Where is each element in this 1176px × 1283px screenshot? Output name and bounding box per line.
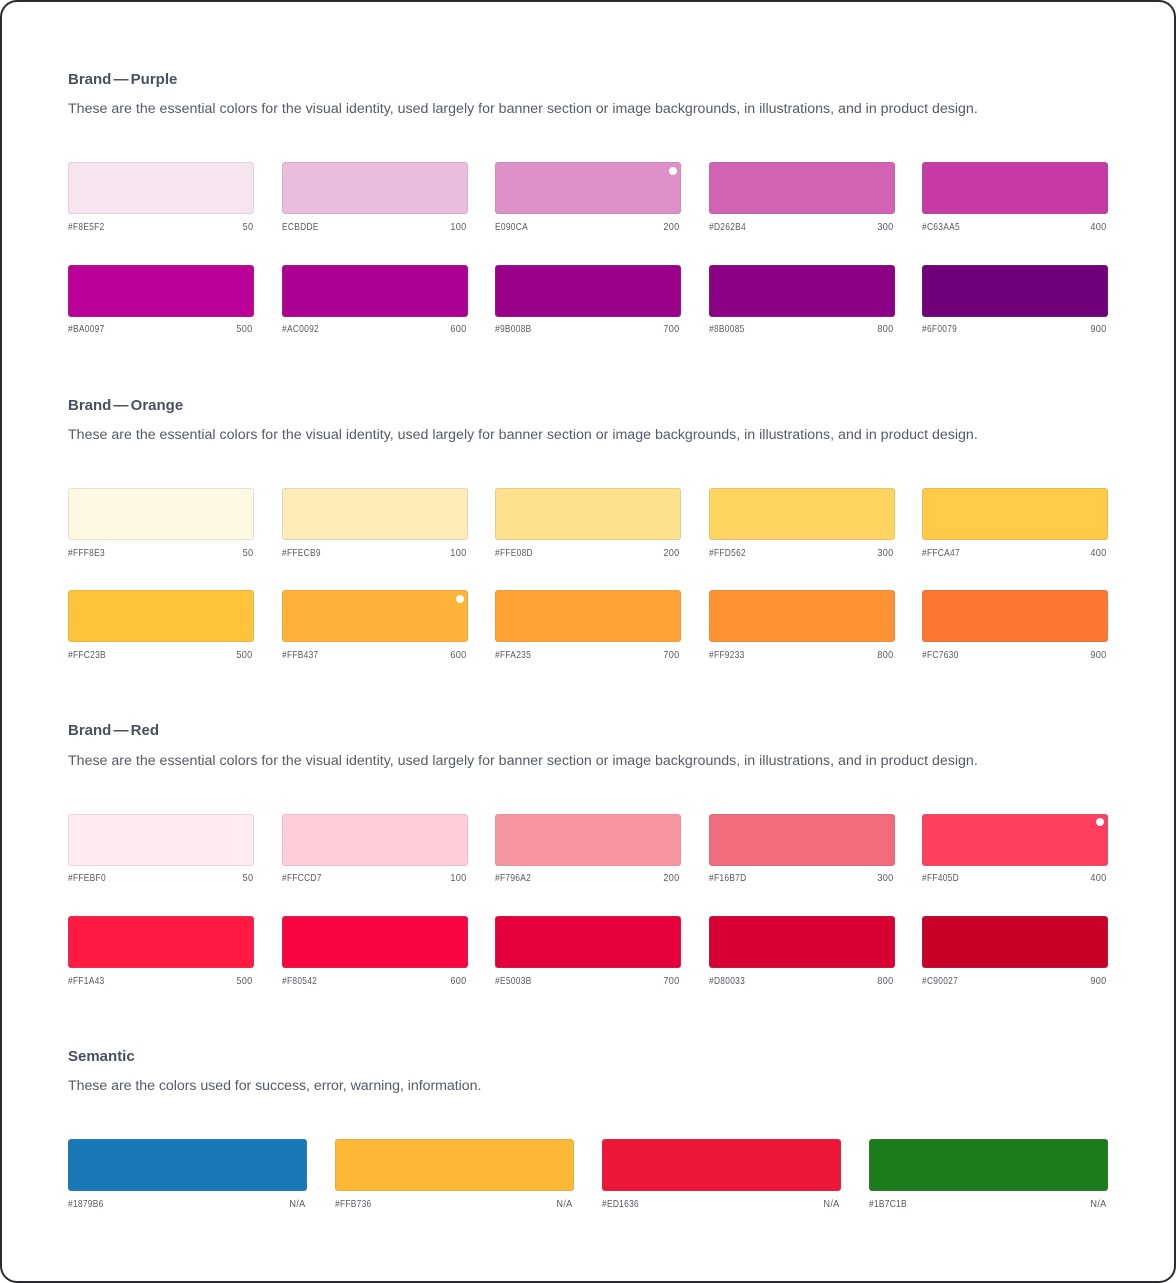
description: Brand Orange: These are the essential colors for the visual identity, used largely for banner section or image backgrounds, in illustrations, and in product design. bbox=[68, 427, 978, 443]
swatch: orange 400: 400 bbox=[1091, 546, 1107, 558]
swatch: purple 800: #8B0085 bbox=[708, 323, 744, 335]
swatch: red 300: #F16B7D bbox=[708, 872, 746, 884]
swatch: semantic blue bbox=[68, 1139, 307, 1210]
swatch: purple 600: 600 bbox=[450, 323, 466, 335]
swatch: purple 50: 50 bbox=[242, 221, 253, 233]
swatch: orange 500: 500 bbox=[237, 649, 253, 661]
swatch: purple 100: ECBDDE bbox=[282, 221, 318, 233]
heading: Semantic: Semantic bbox=[68, 1048, 135, 1064]
swatch: orange 50: 50 bbox=[242, 546, 253, 558]
swatch: red 400 bbox=[922, 814, 1108, 884]
swatch: semantic green: N/A bbox=[1091, 1198, 1107, 1210]
swatch: orange 600 bbox=[282, 590, 468, 661]
swatch: purple 600: #AC0092 bbox=[282, 323, 318, 335]
swatch: orange 300: #FFD562 bbox=[708, 546, 745, 558]
swatch: purple 600 bbox=[282, 265, 468, 335]
swatch: red 100 bbox=[282, 814, 468, 884]
swatch: red 600 bbox=[282, 916, 468, 987]
description: Semantic: These are the colors used for success, error, warning, information. bbox=[68, 1078, 481, 1094]
heading: Brand Red: Brand — Red bbox=[68, 722, 159, 738]
swatch: orange 50 bbox=[68, 488, 254, 558]
swatch: red 50: #FFEBF0 bbox=[68, 872, 106, 884]
swatch: semantic red bbox=[602, 1139, 841, 1210]
swatch: purple 900: 900 bbox=[1091, 323, 1107, 335]
swatch: orange 100 bbox=[282, 488, 468, 558]
swatch: purple 200: 200 bbox=[664, 221, 680, 233]
swatch: red 800: #D80033 bbox=[708, 975, 745, 987]
swatch: orange 200: 200 bbox=[664, 546, 680, 558]
swatch: semantic amber bbox=[335, 1139, 574, 1210]
swatch: red 200: #F796A2 bbox=[495, 872, 531, 884]
swatch: orange 900: 900 bbox=[1091, 649, 1107, 661]
swatch: red 100: #FFCCD7 bbox=[282, 872, 321, 884]
swatch: semantic amber: N/A bbox=[557, 1198, 573, 1210]
swatch: purple 50: #F8E5F2 bbox=[68, 221, 105, 233]
swatch: red 400: #FF405D bbox=[922, 872, 959, 884]
swatch: red 300 bbox=[708, 814, 895, 884]
swatch: red 400: 400 bbox=[1091, 872, 1107, 884]
swatch: orange 500 bbox=[68, 590, 254, 661]
swatch: semantic blue: #1879B6 bbox=[68, 1198, 104, 1210]
swatch: red 50: 50 bbox=[242, 872, 253, 884]
swatch: orange 100: #FFECB9 bbox=[282, 546, 320, 558]
swatch: orange 800 bbox=[708, 590, 895, 661]
swatch: orange 600: #FFB437 bbox=[282, 649, 318, 661]
swatch: orange 400: #FFCA47 bbox=[922, 546, 960, 558]
swatch: purple 300 bbox=[708, 162, 895, 233]
swatch: purple 400: #C63AA5 bbox=[922, 221, 960, 233]
swatch: purple 100: 100 bbox=[450, 221, 466, 233]
swatch: red 800 bbox=[708, 916, 895, 987]
swatch: purple 400 bbox=[922, 162, 1108, 233]
swatch: purple 500: 500 bbox=[237, 323, 253, 335]
swatch: red 500 bbox=[68, 916, 254, 987]
swatch: purple 200 bbox=[495, 162, 681, 233]
swatch: purple 800: 800 bbox=[877, 323, 894, 335]
swatch: red 500: 500 bbox=[237, 975, 253, 987]
swatch: orange 200: #FFE08D bbox=[495, 546, 533, 558]
swatch: red 50 bbox=[68, 814, 254, 884]
swatch: purple 700: 700 bbox=[664, 323, 680, 335]
swatch: orange 100: 100 bbox=[450, 546, 466, 558]
swatch: red 200: 200 bbox=[664, 872, 680, 884]
swatch: purple 700 bbox=[495, 265, 681, 335]
swatch: orange 800: 800 bbox=[877, 649, 894, 661]
swatch: purple 50 bbox=[68, 162, 254, 233]
swatch: purple 400: 400 bbox=[1091, 221, 1107, 233]
swatch: orange 400 bbox=[922, 488, 1108, 558]
swatch: orange 500: #FFC23B bbox=[68, 649, 106, 661]
swatch: red 900: #C90027 bbox=[922, 975, 958, 987]
swatch: red 700: #E5003B bbox=[495, 975, 532, 987]
swatch: red 600: 600 bbox=[450, 975, 466, 987]
swatch: red 700: 700 bbox=[664, 975, 680, 987]
swatch: orange 800: #FF9233 bbox=[708, 649, 744, 661]
heading: Brand Purple: Brand — Purple bbox=[68, 70, 177, 88]
swatch: purple 500: #BA0097 bbox=[68, 323, 105, 335]
description: Brand Purple: These are the essential colors for the visual identity, used largely for banner section or image backgrounds, in illustrations, and in product design. bbox=[68, 101, 978, 117]
swatch: orange 300 bbox=[708, 488, 895, 558]
swatch: red 100: 100 bbox=[450, 872, 466, 884]
swatch: purple 300: 300 bbox=[877, 221, 894, 233]
description: Brand Red: These are the essential colors for the visual identity, used largely for banner section or image backgrounds, in illustrations, and in product design. bbox=[68, 752, 978, 768]
swatch: semantic amber: #FFB736 bbox=[335, 1198, 372, 1210]
swatch: orange 900 bbox=[922, 590, 1108, 661]
swatch: red 800: 800 bbox=[877, 975, 894, 987]
swatch: orange 900: #FC7630 bbox=[922, 649, 959, 661]
swatch: orange 700 bbox=[495, 590, 681, 661]
swatch: red 500: #FF1A43 bbox=[68, 975, 105, 987]
swatch: purple 900: #6F0079 bbox=[922, 323, 957, 335]
swatch: semantic red: #ED1636 bbox=[602, 1198, 639, 1210]
swatch: purple 500 bbox=[68, 265, 254, 335]
swatch: purple 900 bbox=[922, 265, 1108, 335]
swatch: purple 700: #9B008B bbox=[495, 323, 532, 335]
swatch: orange 50: #FFF8E3 bbox=[68, 546, 105, 558]
swatch: orange 300: 300 bbox=[877, 546, 894, 558]
swatch: red 900: 900 bbox=[1091, 975, 1107, 987]
swatch: red 700 bbox=[495, 916, 681, 987]
swatch: semantic red: N/A bbox=[824, 1198, 840, 1210]
swatch: orange 700: 700 bbox=[664, 649, 680, 661]
swatch: purple 100 bbox=[282, 162, 468, 233]
swatch: semantic green bbox=[869, 1139, 1108, 1210]
heading: Brand Orange: Brand — Orange bbox=[68, 396, 183, 414]
swatch: red 300: 300 bbox=[877, 872, 894, 884]
swatch: orange 700: #FFA235 bbox=[495, 649, 531, 661]
swatch: red 200 bbox=[495, 814, 681, 884]
swatch: purple 800 bbox=[708, 265, 895, 335]
swatch: red 600: #F80542 bbox=[282, 975, 317, 987]
swatch: red 900 bbox=[922, 916, 1108, 987]
swatch: purple 200: E090CA bbox=[495, 221, 528, 233]
swatch: semantic green: #1B7C1B bbox=[869, 1198, 907, 1210]
swatch: semantic blue: N/A bbox=[290, 1198, 306, 1210]
swatch: orange 600: 600 bbox=[450, 649, 466, 661]
swatch: orange 200 bbox=[495, 488, 681, 558]
swatch: purple 300: #D262B4 bbox=[708, 221, 745, 233]
